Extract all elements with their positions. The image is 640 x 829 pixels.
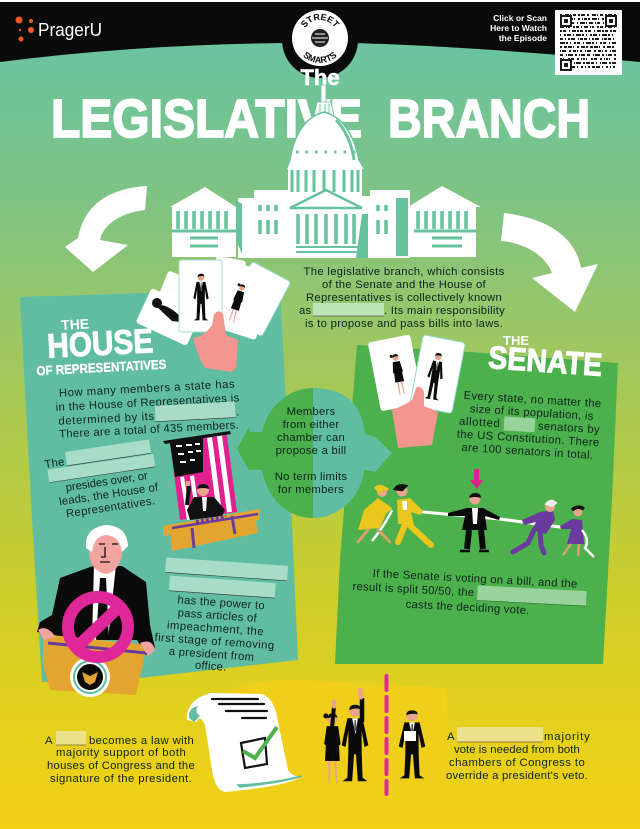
shared facts text: for members [278, 484, 344, 496]
House population text: in the House of Representatives is [55, 392, 240, 414]
Senate text [456, 390, 602, 462]
Senate text: size of its population, is [469, 403, 594, 423]
shared facts text [275, 406, 347, 496]
Senate heading: SENATE [487, 339, 603, 383]
icon: tug of war [358, 485, 594, 557]
Street Smarts badge: STREET [301, 14, 340, 27]
law text: signature of the president. [50, 773, 192, 785]
panel: Senate [335, 333, 618, 664]
override text: chambers of Congress to [449, 757, 585, 769]
House population text: There are a total of 435 members. [59, 419, 239, 441]
Speaker text: The [44, 456, 66, 471]
arrow: left to House [65, 186, 147, 272]
yellow woman [358, 486, 392, 542]
tie-breaker text: If the Senate is voting on a bill, and the [372, 568, 578, 591]
House heading: THE [61, 316, 90, 333]
shared facts text: chamber can [277, 432, 345, 444]
law text: becomes a law with [89, 735, 194, 747]
purple woman [560, 507, 594, 557]
Speaker text [43, 439, 162, 522]
intro text: as [299, 305, 312, 317]
House heading [34, 312, 167, 378]
law text [45, 731, 195, 785]
PragerU logo [16, 16, 102, 42]
override text: majority [544, 731, 590, 743]
law text: houses of Congress and the [47, 760, 195, 772]
Speaker text: presides over, or [65, 470, 149, 494]
impeachment text [152, 557, 288, 678]
impeachment text: pass articles of [177, 607, 258, 625]
intro text: Representatives is collectively known [306, 292, 502, 304]
Senate text: the US Constitution. There [456, 429, 600, 449]
impeachment text: first stage of removing [154, 632, 275, 652]
law text: A [45, 735, 53, 747]
yellow man [395, 485, 431, 545]
QR code [555, 10, 622, 75]
title: Legislative Branch: LEGISLATIVE [51, 89, 362, 149]
PragerU logo: PragerU [38, 19, 102, 40]
left half and arrow [237, 388, 313, 518]
QR call to action: the Episode [499, 33, 547, 43]
title: Legislative Branch: BRANCH [388, 89, 590, 149]
Street Smarts badge: SMARTS [304, 52, 336, 64]
intro text: . Its main responsibility [384, 305, 505, 317]
impeachment text: impeachment, the [167, 620, 264, 638]
intro text: The legislative branch, which consists [304, 266, 505, 278]
House population text [55, 378, 241, 441]
QR call to action: Here to Watch [490, 23, 547, 33]
tie-breaker text: result is split 50/50, the [352, 581, 475, 599]
intro text [299, 266, 505, 330]
shared facts text: No term limits [275, 471, 347, 483]
override text [446, 727, 590, 782]
tie-breaker text [351, 567, 587, 620]
QR call to action: Click or Scan [493, 13, 547, 23]
override text: vote is needed from both [454, 744, 580, 756]
shared facts text: from either [283, 419, 339, 431]
intro text: of the Senate and the House of [322, 279, 487, 291]
shared facts text: propose a bill [276, 445, 346, 457]
Senate heading: THE [503, 333, 529, 348]
impeachment text: a president from [168, 646, 255, 664]
House heading: HOUSE [46, 322, 154, 366]
bottom yellow panel [230, 680, 447, 790]
House heading: OF REPRESENTATIVES [36, 357, 167, 378]
Senate text: allotted [459, 416, 500, 430]
icon: hand holding House cards [136, 256, 291, 372]
impeachment text: office. [195, 660, 227, 674]
top black band [0, 0, 640, 78]
shared facts text: Members [287, 406, 336, 418]
Senate text: are 100 senators in total. [461, 442, 594, 462]
dashed divider [384, 676, 388, 794]
purple man [513, 501, 556, 553]
override text: override a president's veto. [446, 770, 588, 782]
Speaker text: Representatives. [65, 495, 156, 520]
title: Legislative Branch [51, 89, 590, 149]
override text: A [447, 731, 455, 743]
panel: House of Representatives [20, 288, 298, 682]
icon: president with ban sign [37, 525, 155, 697]
icon: pink arrow [470, 469, 483, 489]
Street Smarts badge [292, 10, 348, 66]
black man in centre [448, 493, 500, 551]
QR call to action [490, 13, 547, 43]
tie-breaker text: casts the deciding vote. [405, 599, 530, 617]
House population text: . [236, 406, 240, 418]
Senate text: Every state, no matter the [463, 390, 602, 410]
icon: Capitol building [170, 85, 481, 258]
House population text: determined by its [58, 411, 155, 428]
Senate text: senators by [538, 420, 600, 436]
intro text: is to propose and pass bills into laws. [305, 318, 503, 330]
centre: shared facts [237, 388, 392, 518]
icon: voting people [323, 690, 425, 783]
House population text: How many members a state has [59, 379, 235, 400]
impeachment text: has the power to [177, 594, 265, 612]
icon: scroll with check [187, 693, 302, 792]
title: The: The [300, 65, 340, 90]
icon: flag and speaker [163, 431, 260, 551]
arrow: right to Senate [501, 213, 598, 312]
Speaker text: leads, the House of [58, 482, 160, 508]
right half and arrow [313, 388, 392, 518]
icon: hand holding Senate cards [368, 334, 465, 448]
law text: majority support of both [56, 747, 186, 759]
